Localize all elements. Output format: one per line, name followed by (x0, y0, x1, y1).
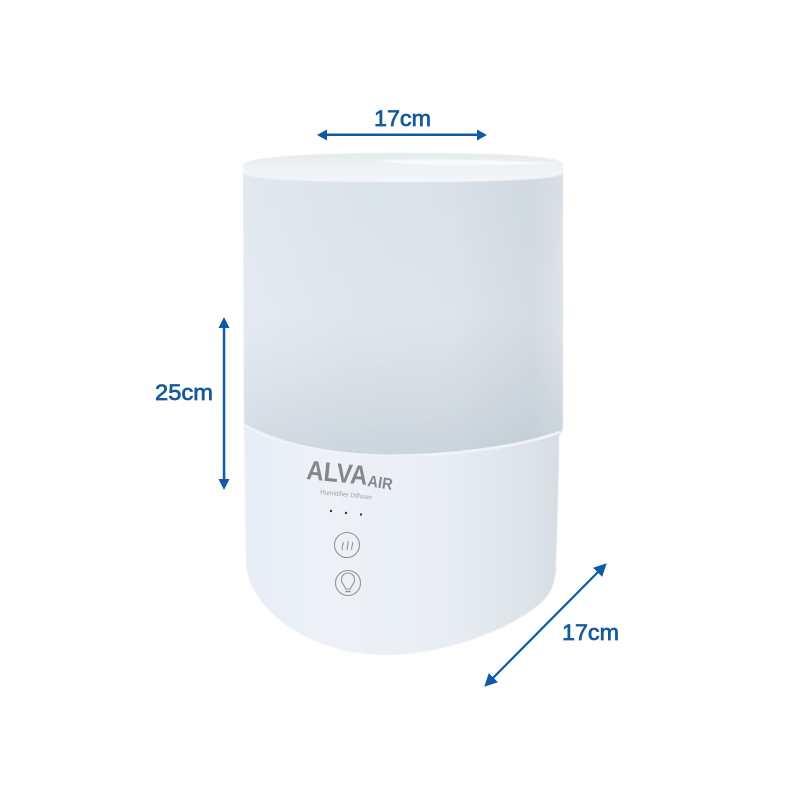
arrow: top width (317, 130, 487, 140)
label: top width: 17cm (374, 106, 431, 131)
label: depth: 17cm (562, 620, 619, 645)
logo: AIR (366, 473, 394, 494)
icon: light bulb button (336, 570, 360, 596)
logo: ALVA (305, 455, 369, 491)
indicator lights (330, 510, 362, 516)
logo (305, 455, 394, 502)
humidifier product (243, 153, 563, 655)
lid (243, 153, 563, 182)
logo: Humidifier Diffuser (320, 489, 373, 502)
top width dimension (317, 106, 487, 140)
arrow: height (218, 317, 230, 490)
icon: mist button (334, 532, 360, 558)
arrow: depth (485, 564, 606, 686)
label: height: 25cm (155, 380, 213, 405)
height dimension (155, 317, 230, 490)
water tank (243, 170, 563, 457)
base (244, 425, 560, 655)
depth dimension (485, 564, 619, 686)
